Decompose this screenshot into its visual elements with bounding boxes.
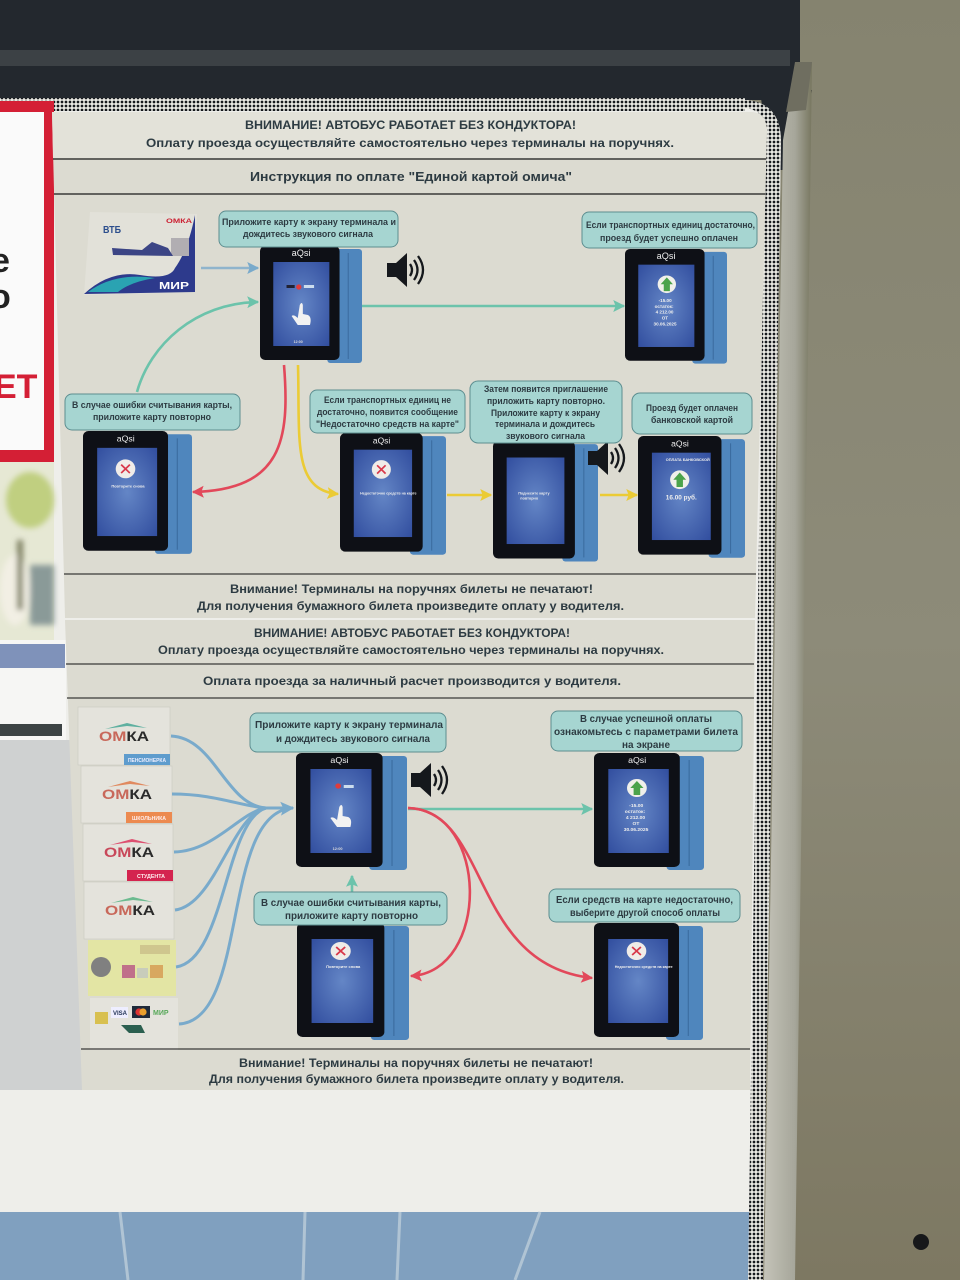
arrows: cards to terminal bbox=[171, 736, 293, 1024]
callout: tap card bbox=[219, 211, 398, 247]
terminal: paid: aQsi bbox=[657, 251, 676, 261]
callout: success: на экране bbox=[622, 740, 670, 751]
callout: tap card bbox=[250, 713, 446, 752]
footer notice: Внимание! Терминалы на поручнях билеты не печатают! bbox=[239, 1058, 593, 1070]
terminal: insufficient funds bbox=[340, 433, 446, 555]
footer notice: Для получения бумажного билета произведите оплату у водителя. bbox=[197, 599, 624, 613]
terminal: read error bbox=[83, 431, 192, 554]
panel: Omka and cash poster bbox=[65, 620, 755, 1090]
card: VTB Omka MIR: МИР bbox=[159, 281, 189, 292]
heading band: ВНИМАНИЕ! АВТОБУС РАБОТАЕТ БЕЗ КОНДУКТОРА! bbox=[254, 628, 570, 640]
card: Omka school: ШКОЛЬНИКА bbox=[132, 816, 166, 822]
callout: read error: В случае ошибки считывания карты, bbox=[72, 400, 232, 411]
sub-heading band: Инструкция по оплате "Единой картой омича" bbox=[250, 169, 572, 184]
terminal: paid: -15.00 bbox=[659, 298, 672, 303]
footer notice: Для получения бумажного билета произведите оплату у водителя. bbox=[209, 1074, 624, 1086]
terminal: paid: остаток: bbox=[655, 304, 674, 309]
terminal: paid: 4 212.00 bbox=[626, 815, 646, 821]
card: Omka school bbox=[81, 766, 172, 823]
footer notice: Внимание! Терминалы на поручнях билеты не печатают! bbox=[230, 582, 593, 596]
callout: read error: приложите карту повторно bbox=[93, 412, 211, 423]
arrow: success teal line bbox=[408, 808, 592, 810]
card: bank payment systems: МИР bbox=[153, 1010, 169, 1017]
icon: speaker bbox=[411, 763, 447, 797]
terminal: tap card: 12:00 bbox=[333, 847, 343, 851]
callout: tap again: приложить карту повторно. bbox=[487, 396, 605, 407]
terminal: tap card: 12:00 bbox=[294, 340, 303, 344]
terminal: tap card bbox=[296, 753, 407, 870]
heading band bbox=[52, 112, 767, 159]
callout: success bbox=[551, 711, 742, 751]
callout: read error bbox=[254, 892, 447, 925]
terminal: paid: ОТ bbox=[662, 316, 668, 321]
callout: tap card: дождитесь звукового сигнала bbox=[243, 229, 374, 240]
terminal: insufficient bbox=[594, 923, 703, 1040]
card: bank payment systems: VISA bbox=[113, 1011, 128, 1017]
callout: read error: приложите карту повторно bbox=[285, 911, 418, 922]
arrow: red to error bbox=[408, 808, 470, 976]
terminal: bank card paid: ОПЛАТА БАНКОВСКОЙ bbox=[666, 458, 710, 462]
callout: read error: В случае ошибки считывания карты, bbox=[261, 897, 441, 909]
terminal: tap again: Поднесите карту bbox=[518, 492, 550, 496]
card: VTB Omka MIR: ОМКА bbox=[166, 219, 193, 225]
callout: paid by bank card: Проезд будет оплачен bbox=[646, 403, 738, 414]
callout: enough units: проезд будет успешно оплачен bbox=[600, 233, 738, 244]
callout: enough units: Если транспортных единиц достаточно, bbox=[586, 220, 755, 231]
terminal: tap again: повторно bbox=[520, 497, 539, 501]
card: VTB Omka MIR: ВТБ bbox=[103, 225, 121, 236]
card: yellow transport card bbox=[88, 940, 176, 996]
terminal: paid bbox=[625, 249, 727, 364]
card: bank payment systems bbox=[90, 998, 178, 1050]
footer notice bbox=[64, 574, 756, 613]
callout: success: В случае успешной оплаты bbox=[580, 714, 712, 725]
terminal: paid: aQsi bbox=[628, 755, 646, 765]
terminal: tap card: aQsi bbox=[330, 755, 349, 765]
callout: insufficient units bbox=[310, 390, 465, 433]
callout: tap again: звукового сигнала bbox=[506, 431, 586, 442]
arrow: yellow to retry bbox=[447, 494, 491, 496]
card: Omka student: ОМ КА bbox=[104, 844, 154, 860]
heading band: Оплату проезда осуществляйте самостоятельно через терминалы на поручнях. bbox=[158, 645, 664, 657]
callout: read error bbox=[65, 394, 240, 430]
callout: enough units bbox=[582, 212, 757, 248]
terminal: paid: 30.06.2025 bbox=[624, 827, 649, 833]
terminal: bank card paid: 16.00 руб. bbox=[666, 494, 697, 501]
terminal: tap card: aQsi bbox=[292, 248, 310, 258]
terminal: tap again bbox=[493, 441, 598, 562]
arrow: red to insufficient bbox=[408, 808, 592, 978]
callout: tap again: Затем появится приглашение bbox=[484, 384, 608, 395]
arrow: retry teal curve bbox=[137, 302, 258, 392]
callout: tap card: Приложите карту к экрану терминала и bbox=[222, 217, 396, 228]
icon: speaker bbox=[387, 253, 423, 287]
terminal: paid: 30.06.2025 bbox=[654, 322, 677, 326]
arrow: card to terminal bbox=[201, 267, 258, 269]
terminal: paid bbox=[594, 753, 704, 870]
arrow: yellow to paid bbox=[600, 494, 637, 496]
callout: insufficient: выберите другой способ оплаты bbox=[570, 907, 720, 919]
card: Omka standard: ОМ КА bbox=[105, 902, 155, 918]
terminal: paid: ОТ bbox=[633, 821, 639, 827]
footer notice bbox=[81, 1049, 750, 1086]
terminal: paid: -15.00 bbox=[629, 803, 644, 809]
card: Omka student: СТУДЕНТА bbox=[137, 874, 165, 880]
terminal: bank card paid: aQsi bbox=[671, 439, 689, 448]
arrow: retry up bbox=[351, 876, 353, 892]
heading band: Оплата проезда за наличный расчет производится у водителя. bbox=[203, 674, 621, 688]
callout: insufficient: Если средств на карте недостаточно, bbox=[556, 895, 733, 906]
card: VTB Omka MIR bbox=[84, 212, 197, 295]
sign: red notice behind poster bbox=[0, 101, 54, 462]
panel: bank card instruction poster bbox=[52, 112, 767, 618]
card: Omka pensioner: ОМ КА bbox=[99, 728, 149, 744]
callout: insufficient units: "Недостаточно средств на карте" bbox=[316, 419, 459, 430]
terminal: insufficient funds: Недостаточно средств на карте bbox=[360, 491, 417, 495]
heading band bbox=[66, 628, 754, 698]
icon: speaker bbox=[588, 441, 624, 475]
card: Omka standard bbox=[84, 882, 174, 939]
terminal: tap card bbox=[260, 246, 362, 363]
icon: wall screw bbox=[913, 1234, 929, 1250]
terminal: read error: Повторите снова bbox=[326, 965, 361, 969]
heading band: ВНИМАНИЕ! АВТОБУС РАБОТАЕТ БЕЗ КОНДУКТОРА! bbox=[245, 118, 576, 132]
terminal: insufficient funds: aQsi bbox=[373, 436, 390, 445]
callout: insufficient bbox=[549, 889, 740, 922]
callout: tap again: Приложите карту к экрану bbox=[491, 408, 601, 419]
terminal: paid: 4 212.00 bbox=[656, 310, 674, 315]
callout: insufficient units: Если транспортных единиц не bbox=[324, 395, 451, 406]
terminal: read error: Повторите снова bbox=[111, 485, 145, 489]
callout: success: ознакомьтесь с параметрами билета bbox=[554, 726, 738, 738]
callout: tap card: Приложите карту к экрану терминала bbox=[255, 720, 443, 731]
terminal: read error: aQsi bbox=[117, 434, 135, 444]
callout: tap again bbox=[470, 381, 622, 443]
callout: tap card: и дождитесь звукового сигнала bbox=[276, 734, 430, 745]
card: Omka school: ОМ КА bbox=[102, 786, 152, 802]
callout: tap again: терминала и дождитесь bbox=[495, 419, 595, 430]
heading band: Оплату проезда осуществляйте самостоятельно через терминалы на поручнях. bbox=[146, 136, 674, 150]
terminal: paid: остаток: bbox=[625, 810, 646, 815]
terminal: read error bbox=[297, 923, 409, 1040]
terminal: bank card paid bbox=[638, 436, 745, 558]
callout: paid by bank card: банковской картой bbox=[651, 415, 733, 426]
callout: insufficient units: достаточно, появится сообщение bbox=[317, 407, 458, 418]
callout: paid by bank card bbox=[632, 393, 752, 434]
card: Omka student bbox=[83, 824, 173, 881]
card: Omka pensioner: ПЕНСИОНЕРКА bbox=[128, 758, 166, 764]
arrow: red error curve bbox=[193, 365, 286, 492]
terminal: insufficient: Недостаточно средств на карте bbox=[615, 965, 673, 969]
arrow: yellow insufficient funds bbox=[298, 365, 338, 494]
arrow: success teal line bbox=[362, 305, 624, 307]
card: Omka pensioner bbox=[78, 707, 170, 765]
